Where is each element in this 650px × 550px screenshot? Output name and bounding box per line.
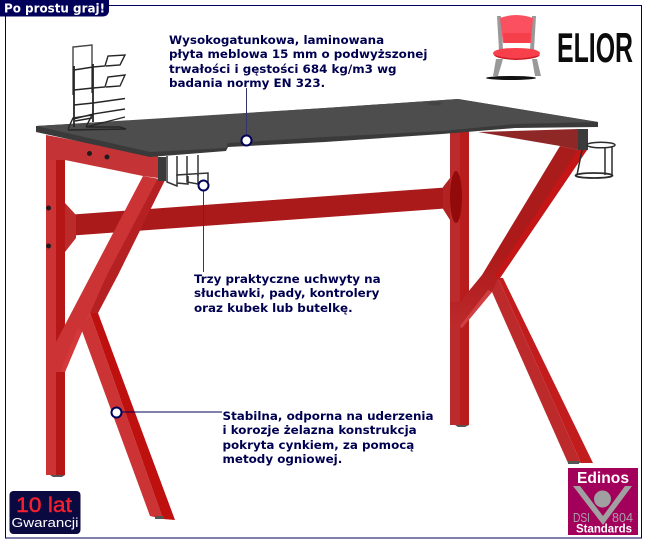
text block: board description: płyta meblowa 15 mm o podwyższonej xyxy=(169,47,427,61)
badge: 10 lat warranty: 10 lat xyxy=(16,494,72,517)
hanger hooks xyxy=(167,155,208,186)
right diagonal xyxy=(450,146,587,328)
badge: Edinos standards xyxy=(568,468,638,536)
badge: Edinos standards: Edinos xyxy=(577,470,629,487)
text block: frame description xyxy=(222,409,434,466)
callout: board pointer xyxy=(242,88,252,146)
text block: frame description: metody ogniowej. xyxy=(222,452,342,466)
badge: Edinos standards: DSI xyxy=(573,510,590,525)
icon: chair logo xyxy=(486,15,541,80)
left bracket xyxy=(158,157,166,181)
cup holder xyxy=(576,142,615,178)
right apron xyxy=(478,129,578,150)
text block: frame description: Stabilna, odporna na uderzenia xyxy=(222,409,434,423)
text block: hooks description: Trzy praktyczne uchwyty na xyxy=(194,272,381,286)
text block: board description: Wysokogatunkowa, laminowana xyxy=(169,33,384,47)
callout: frame pointer xyxy=(112,408,222,418)
headset rack xyxy=(68,45,126,130)
text block: hooks description xyxy=(194,272,381,315)
left leg vertical xyxy=(46,137,65,477)
cross beam xyxy=(65,178,452,252)
left rear leg xyxy=(82,313,175,520)
badge: 10 lat warranty: Gwarancji xyxy=(12,516,78,530)
text block: board description xyxy=(169,33,427,90)
left apron xyxy=(46,135,158,178)
text block: frame description: i korozje żelazna konstrukcja xyxy=(222,423,417,437)
badge: Edinos standards: 804 xyxy=(612,510,633,525)
right rear leg xyxy=(492,278,593,464)
right leg vertical xyxy=(450,130,469,427)
title tab: Po prostu graj! xyxy=(4,2,105,16)
desk illustration xyxy=(36,45,615,520)
text block: hooks description: słuchawki, pady, kontrolery xyxy=(194,286,379,300)
left diagonal xyxy=(46,176,165,372)
bolts xyxy=(46,151,110,248)
text block: frame description: pokryta cynkiem, za pomocą xyxy=(222,438,414,452)
text block: board description: trwałości i gęstości 684 kg/m3 wg xyxy=(169,62,397,76)
callout: hooks pointer xyxy=(198,180,208,272)
badge: Edinos standards: Standards xyxy=(576,524,632,536)
badge: 10 lat warranty xyxy=(10,491,80,534)
right bracket xyxy=(578,129,588,150)
desk top xyxy=(36,99,598,157)
text block: hooks description: oraz kubek lub butelkę. xyxy=(194,301,353,315)
text block: board description: badania normy EN 323. xyxy=(169,76,325,90)
